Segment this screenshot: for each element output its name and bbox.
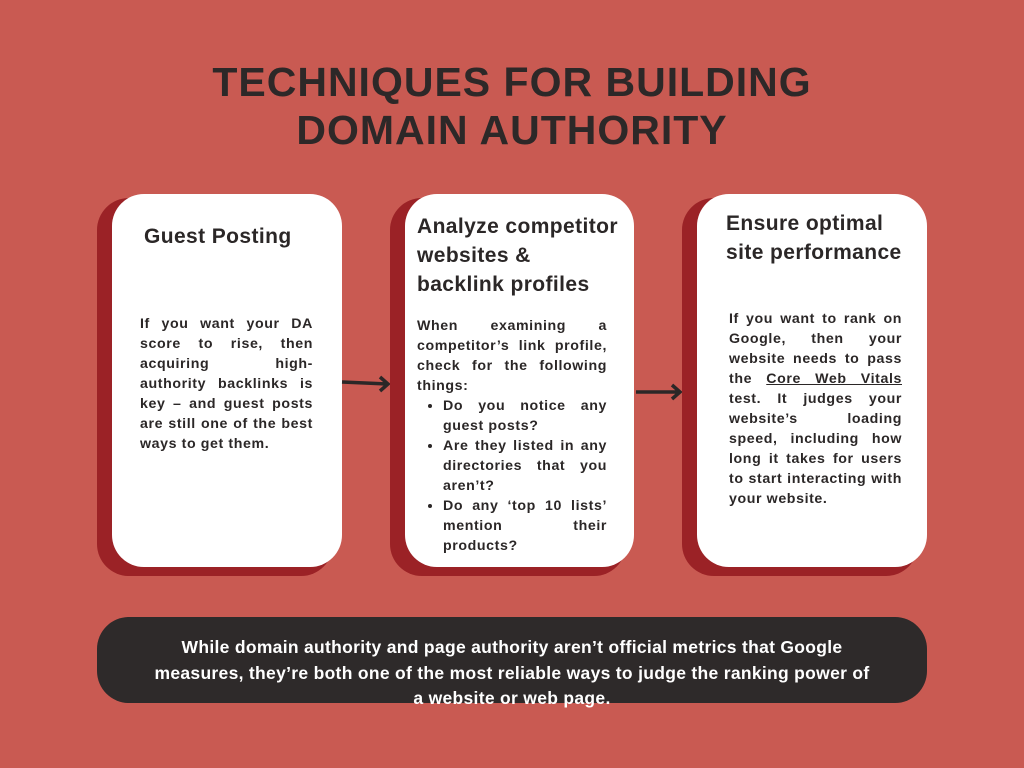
panel: guest posting shadow (97, 198, 333, 576)
text: guest posting: If you want your DA score to rise, then acquiring high-authority backlinks is key – and guest posts are still one of the best ways to get them. (140, 316, 313, 452)
arrow 2 (636, 384, 682, 400)
panel: competitor shadow (390, 198, 626, 576)
heading: performance (726, 212, 902, 264)
text: analyze: When examining a competitor’s link profile, check for the following things: (417, 318, 607, 394)
panel: site performance (697, 194, 927, 567)
heading: performance: site performance (726, 241, 902, 264)
footer callout: a website or web page. (413, 688, 611, 708)
heading: performance: Ensure optimal (726, 212, 883, 235)
heading: guest posting: Guest Posting (144, 225, 292, 248)
title: TECHNIQUES FOR BUILDING (212, 59, 812, 105)
heading: analyze: backlink profiles (417, 273, 590, 296)
heading: analyze (417, 215, 618, 296)
text: analyze: Do any ‘top 10 lists’ mention their products? (443, 498, 607, 554)
panel: performance shadow (682, 198, 918, 576)
title: DOMAIN AUTHORITY (296, 107, 728, 153)
footer callout: measures, they’re both one of the most reliable ways to judge the ranking power of (154, 662, 870, 682)
panel: guest posting (112, 194, 342, 567)
text: analyze (417, 318, 607, 554)
heading: analyze: Analyze competitor websites & (417, 215, 618, 267)
title (212, 59, 812, 153)
panel: analyze competitors (405, 194, 634, 567)
text: analyze: Do you notice any guest posts? (443, 398, 607, 434)
arrow 1 (342, 376, 390, 392)
footer callout (97, 617, 927, 703)
text: performance: If you want to rank on Google, then your website needs to pass the Core Web Vitals test. It judges your website’s loading speed, including how long it takes for users to start interacting with your website. (729, 311, 902, 507)
footer callout: While domain authority and page authority aren’t official metrics that Google (182, 637, 842, 657)
text: analyze: Are they listed in any directories that you aren’t? (443, 438, 607, 494)
